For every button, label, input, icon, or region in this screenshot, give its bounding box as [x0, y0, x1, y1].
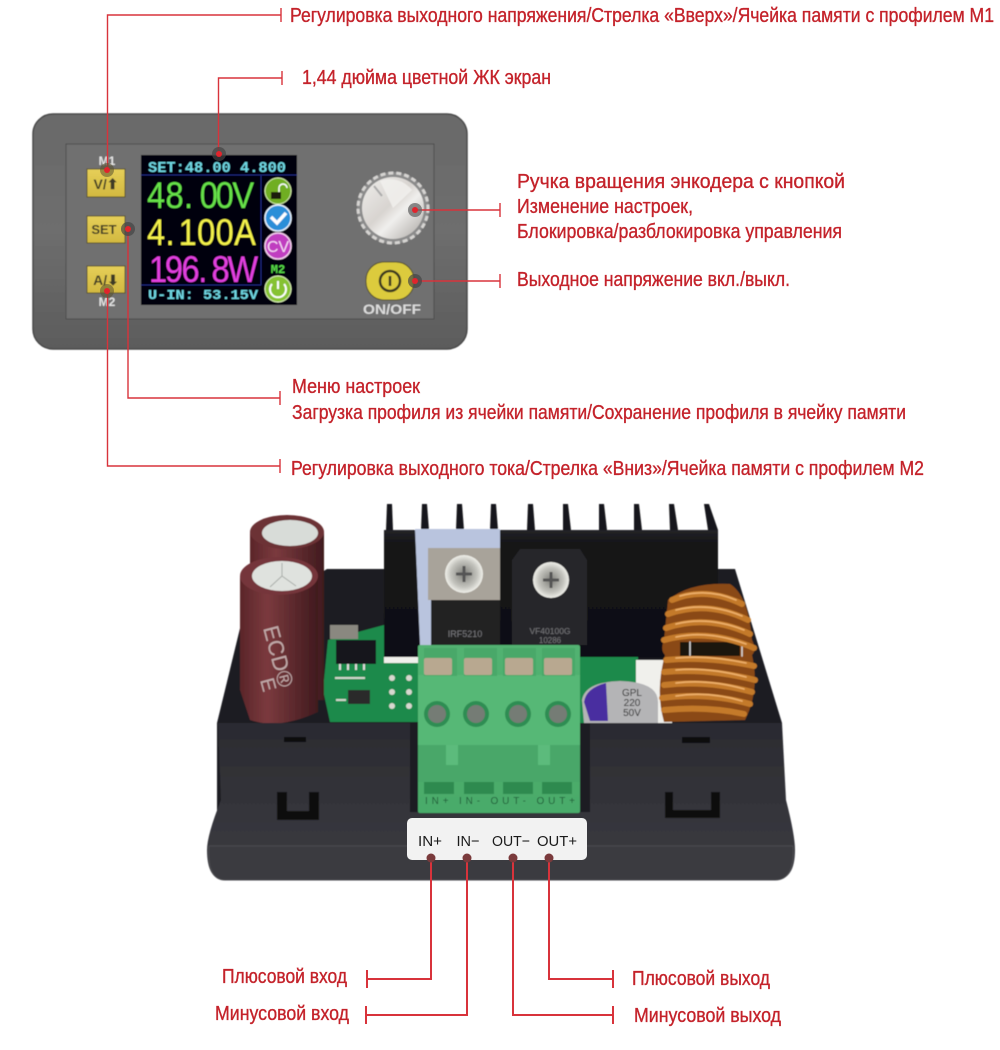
terminal label plate: OUT− — [492, 833, 530, 850]
button: SET: SET — [91, 222, 117, 237]
terminal label plate: OUT+ — [537, 833, 577, 850]
transistor VF40100G: 10286 — [539, 636, 562, 645]
label: encoder — [517, 170, 845, 243]
label: settings menu — [292, 375, 906, 424]
front walls and flange — [207, 723, 795, 880]
PCB right — [578, 657, 672, 723]
green terminal block — [418, 645, 580, 813]
copper coil — [660, 584, 755, 722]
capacitor GPL — [582, 681, 658, 723]
label: output on/off: Выходное напряжение вкл./выкл. — [517, 268, 790, 291]
LCD screen: 48.00V — [147, 175, 255, 216]
label: encoder: Изменение настроек, — [517, 195, 693, 218]
green terminal block: IN+ IN- OUT- OUT+ — [425, 796, 575, 807]
terminal label plate: IN+ — [418, 833, 442, 850]
slot left — [277, 737, 319, 820]
heatsink — [384, 504, 718, 658]
LCD screen: U-IN: 53.15V — [148, 288, 259, 304]
LCD screen: 196.8W — [149, 249, 258, 290]
capacitor front — [240, 557, 318, 724]
LCD screen — [141, 155, 297, 305]
LCD screen: M2 — [271, 263, 285, 277]
panel: rear view of module — [207, 504, 795, 880]
terminal label plate: IN− — [456, 833, 480, 850]
button: A down: A/⬇ — [93, 272, 119, 288]
terminal label plate — [407, 818, 587, 860]
label: LCD: 1,44 дюйма цветной ЖК экран — [302, 66, 551, 89]
LCD screen: SET:48.00 4.800 — [148, 160, 286, 177]
encoder knob — [357, 172, 429, 244]
label: M1: M1 — [99, 154, 116, 168]
capacitor back — [250, 515, 324, 700]
callout lines: top panel — [100, 8, 500, 473]
panel: front control panel — [33, 114, 467, 349]
callout lines: terminals — [366, 854, 613, 1024]
LCD screen: 4.100A — [147, 212, 257, 253]
inner recess — [66, 144, 434, 319]
LCD screen: CV — [267, 239, 289, 256]
on/off button — [366, 262, 414, 300]
label: ON/OFF: ON/OFF — [363, 301, 421, 317]
capacitor GPL: 220 — [624, 698, 641, 709]
panel housing — [33, 114, 467, 349]
capacitor front: E — [255, 676, 280, 694]
button: V up: V/⬆ — [94, 176, 118, 192]
label: settings menu: Загрузка профиля из ячейки памяти/Сохранение профиля в ячейку памяти — [292, 401, 906, 424]
flange band — [209, 846, 793, 880]
label: minus output: Минусовой выход — [634, 1004, 781, 1027]
button: SET — [87, 216, 125, 243]
label: plus input: Плюсовой вход — [222, 965, 347, 988]
label: minus input: Минусовой вход — [215, 1002, 349, 1025]
capacitor GPL: 50V — [623, 708, 641, 719]
capacitor GPL: GPL — [622, 688, 642, 699]
label: settings menu: Меню настроек — [292, 375, 421, 398]
slot right — [665, 737, 720, 818]
transistor VF40100G: VF40100G — [529, 626, 571, 636]
label: encoder: Блокировка/разблокировка управления — [517, 220, 842, 243]
PCB left — [323, 625, 418, 722]
label: M2: M2 — [99, 295, 116, 309]
button: V up — [87, 169, 125, 197]
label: plus output: Плюсовой выход — [632, 967, 770, 990]
capacitor front: ECD® — [258, 623, 299, 690]
transistor IRF5210: IRF5210 — [448, 629, 482, 639]
inner cavity and back wall — [217, 569, 782, 815]
transistor VF40100G — [512, 549, 587, 645]
label: encoder: Ручка вращения энкодера с кнопкой — [517, 170, 845, 193]
button: A down — [87, 266, 125, 293]
transistor IRF5210 — [415, 529, 500, 648]
